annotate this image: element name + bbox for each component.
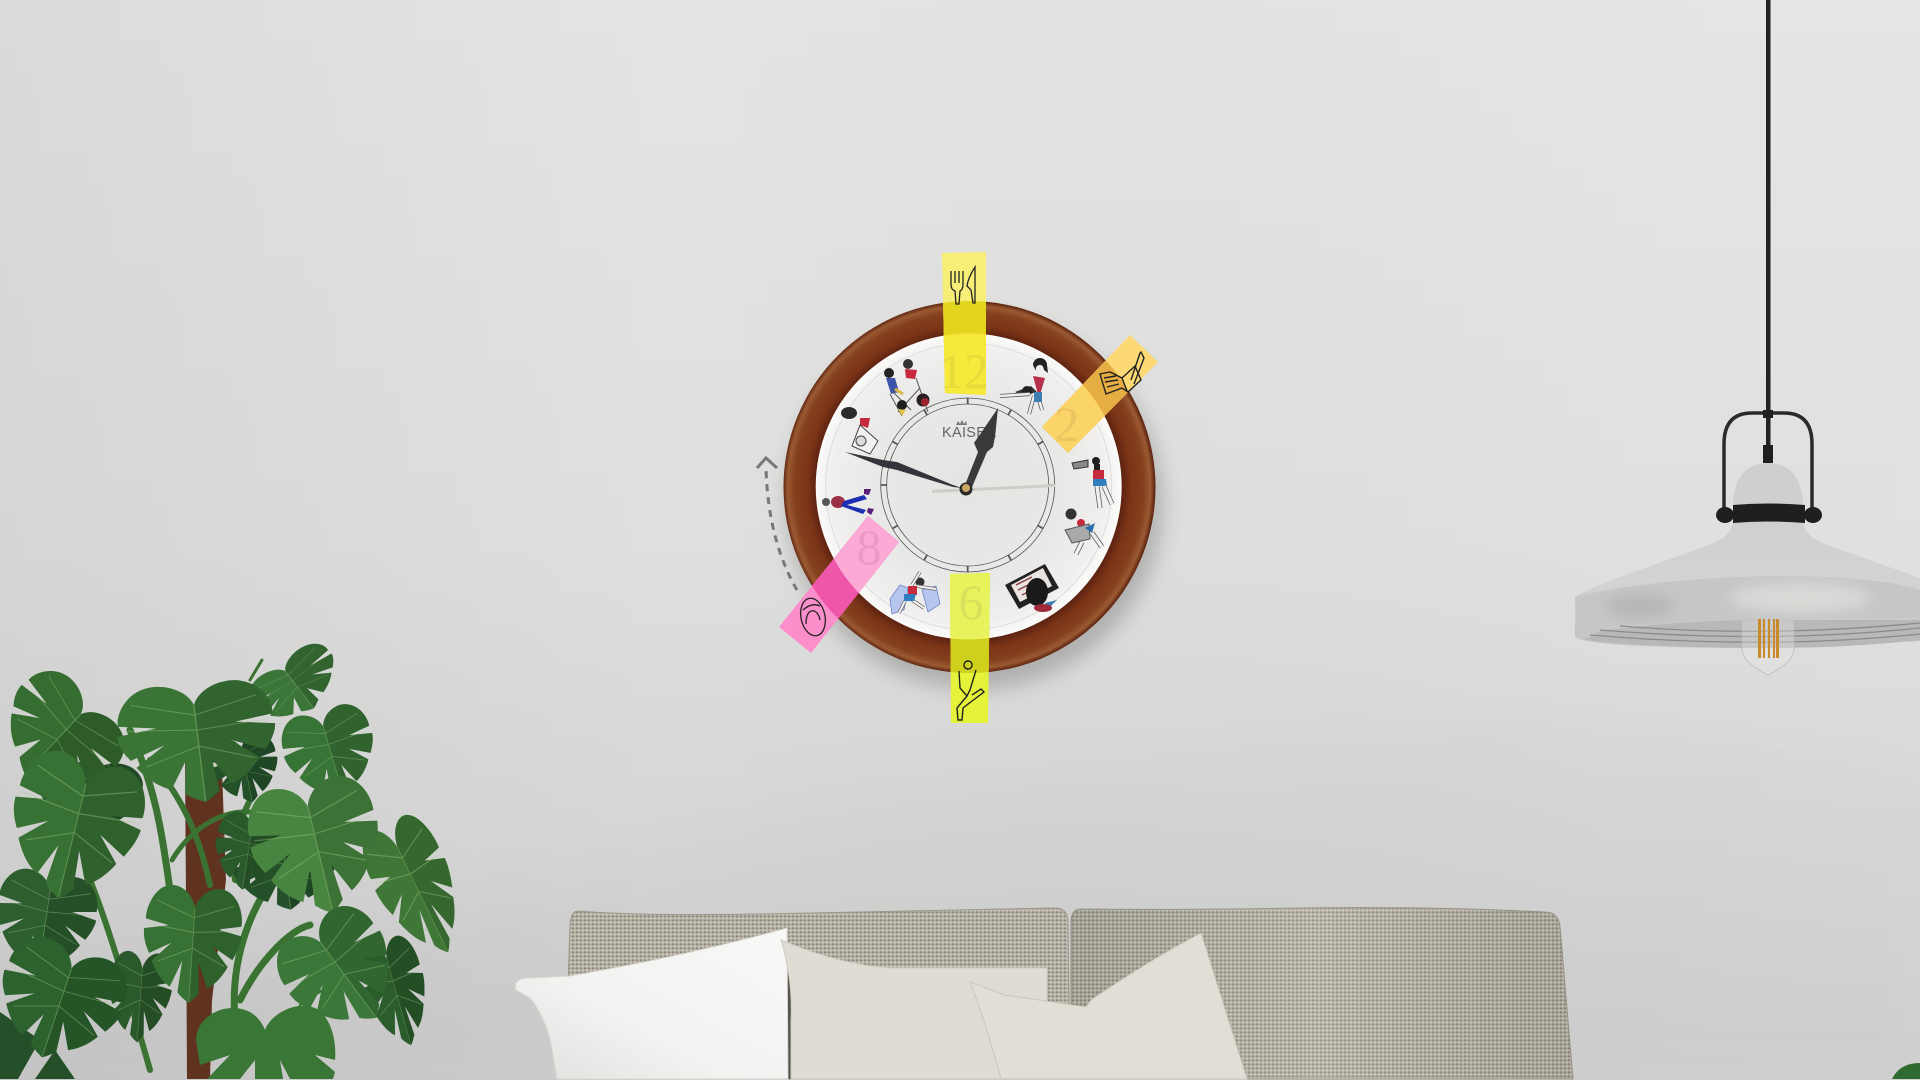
- figure: girl with paper: [841, 407, 878, 454]
- icon: backpack: [797, 596, 829, 638]
- leaf: middle back: [229, 829, 341, 914]
- leaf: behind trunk right: [208, 809, 287, 895]
- clock rim: [784, 301, 1156, 673]
- hour hand: [965, 408, 998, 487]
- wall clock: [784, 301, 1156, 673]
- icon: fork and knife: [951, 267, 975, 304]
- figure: angel dancer: [890, 572, 940, 614]
- leaf: behind upper left: [34, 757, 146, 837]
- sofa: [515, 908, 1573, 1079]
- inner ring: [881, 398, 1055, 572]
- sofa left cushion: [565, 908, 1070, 1079]
- leaf: lower right: [264, 894, 420, 1051]
- number 12: 12: [939, 343, 989, 399]
- clock shadow: [787, 317, 1163, 689]
- number 6: 6: [958, 574, 984, 630]
- leaf: behind top right: [206, 731, 284, 808]
- leaf: bottom centre: [196, 1006, 335, 1079]
- lamp shade: [1575, 463, 1920, 648]
- leaf: large centre right: [239, 770, 394, 927]
- sticky note 6: [950, 573, 990, 723]
- leaf: centre: [138, 883, 246, 1007]
- figure: friends playing: [884, 359, 930, 416]
- lamp band: [1716, 504, 1822, 523]
- leaf: upper right: [275, 699, 386, 810]
- sticky note 2: [1042, 335, 1158, 453]
- icon: book and pencil: [1100, 352, 1144, 394]
- lamp bulb: [1742, 619, 1794, 675]
- beige middle pillow: [781, 940, 1047, 1079]
- corner plant: [1892, 1063, 1920, 1079]
- lamp handle: [1724, 413, 1812, 510]
- dark gap between pillows: [780, 960, 796, 1079]
- white pillow: [515, 928, 788, 1079]
- logo: KAISER: [942, 425, 997, 441]
- figure: girl walking: [822, 489, 874, 515]
- leaf: left: [0, 743, 155, 914]
- figure: girl with book: [1065, 508, 1102, 554]
- second hand: [932, 484, 1055, 493]
- figure: girl at blackboard: [1005, 564, 1059, 612]
- minute hand: [845, 452, 962, 488]
- sticky note 8: [779, 516, 899, 653]
- figure: girl cooking: [1000, 358, 1048, 414]
- dashed arrow: [757, 458, 797, 590]
- leaf: bottom corner fill: [0, 1012, 75, 1079]
- leaf: top centre: [113, 677, 281, 809]
- leaf: far right frond: [352, 807, 481, 969]
- clock face: [816, 334, 1122, 640]
- front pillow: [970, 933, 1247, 1079]
- leaf: bottom left: [0, 928, 137, 1078]
- plant stems: [90, 660, 345, 1070]
- leaf: behind lower centre left: [105, 949, 175, 1045]
- lamp collar: [1763, 410, 1773, 463]
- pendant lamp: [1575, 0, 1920, 675]
- figure: girl reading: [1072, 457, 1112, 508]
- leaf: lower right back: [351, 932, 440, 1054]
- leaf: top small: [240, 635, 352, 737]
- icon: running figure: [957, 661, 984, 720]
- plant trunk: [185, 760, 226, 1079]
- leaf: lower left: [0, 864, 103, 980]
- sticky note 12: [942, 252, 986, 395]
- number 2: 2: [1054, 396, 1080, 452]
- lamp cord: [1766, 0, 1770, 462]
- sofa right cushion: [1071, 908, 1573, 1079]
- leaf: top left: [0, 657, 138, 816]
- number 8: 8: [856, 519, 882, 575]
- clock pivot: [960, 482, 972, 496]
- monstera plant: [0, 635, 481, 1079]
